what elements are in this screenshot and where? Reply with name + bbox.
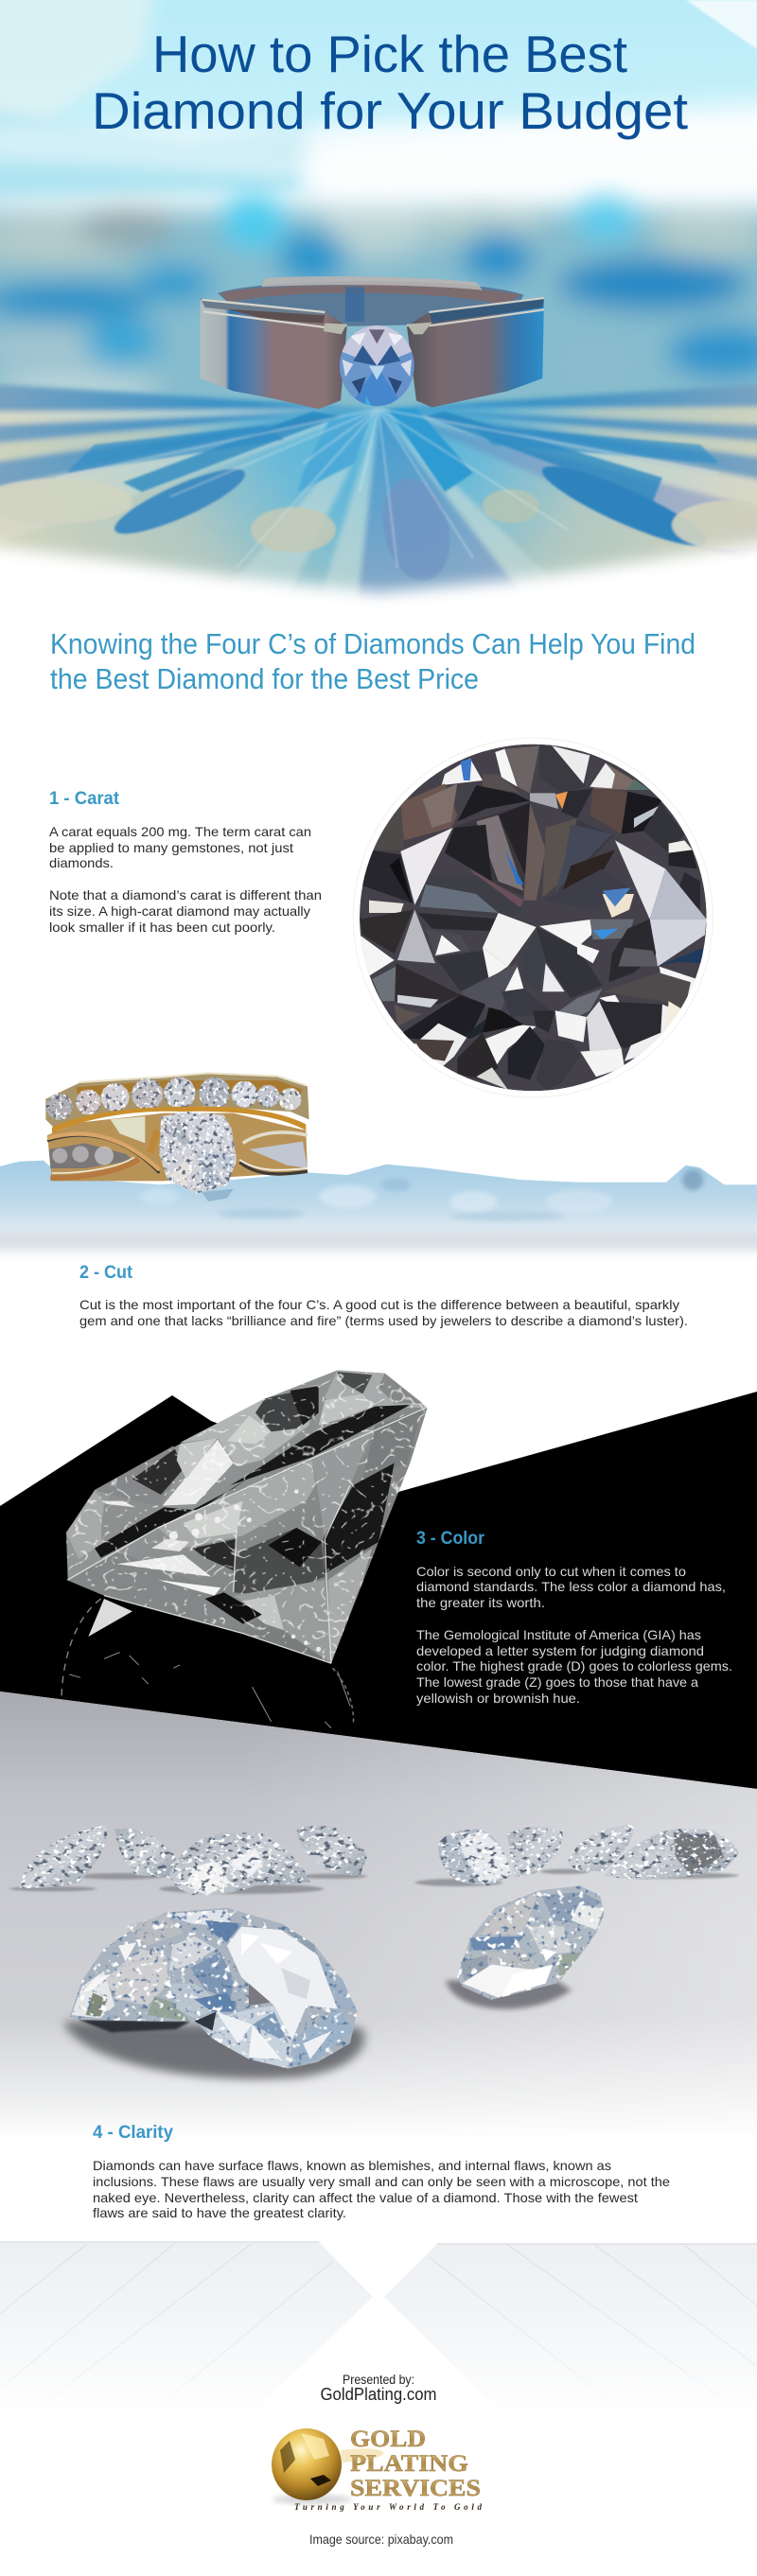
soft shadows (9, 1869, 739, 1894)
body (69, 1908, 358, 2069)
sparkle points (169, 1489, 321, 1652)
section 1: carat text: diamonds. (49, 855, 114, 870)
logo: Gold Plating Services: GOLD (350, 2427, 426, 2452)
section 3: color text: 3 - Color (416, 1529, 485, 1549)
small background diamonds (9, 1824, 739, 1896)
section 4: clarity text: Diamonds can have surface flaws, known as blemishes, and internal flaws, known as (93, 2158, 611, 2173)
ring gemstone (338, 324, 416, 410)
large right diamond (446, 1885, 605, 2009)
section 3: color text: developed a letter system for judging diamond (416, 1643, 704, 1658)
presented by credit: Presented by: (343, 2372, 414, 2387)
large left diamond (64, 1908, 364, 2079)
ring back band (218, 281, 523, 331)
grey studio backdrop (0, 1691, 757, 2176)
outer top facets (442, 759, 483, 785)
left side (360, 850, 414, 903)
section 1: carat text: Note that a diamond’s carat is different than (49, 887, 322, 902)
section 3: color text: diamond standards. The less color a diamond has, (416, 1579, 726, 1594)
section 4: clarity text (93, 2123, 670, 2220)
left band (201, 300, 347, 409)
section 1: carat text: its size. A high-carat diamond may actually (49, 903, 310, 919)
section 1: carat text: A carat equals 200 mg. The term carat can (49, 824, 311, 839)
hero ray details (0, 409, 757, 587)
section 3: color text: color. The highest grade (D) goes to colorless gems. (416, 1658, 732, 1674)
section 3: color text (416, 1529, 732, 1706)
right band (407, 298, 544, 408)
section 1: carat text: 1 - Carat (49, 789, 120, 809)
section 3: color text: yellowish or brownish hue. (416, 1691, 580, 1706)
lower stones right (249, 1142, 308, 1168)
bright crown table (227, 1927, 338, 2041)
channel stones (46, 1078, 302, 1120)
ice shelf (0, 1161, 757, 1262)
main kites (400, 828, 452, 905)
shadow (64, 2022, 364, 2079)
twist strands (47, 1135, 159, 1173)
pavilion facets (158, 1460, 315, 1549)
gold shank (52, 1107, 306, 1133)
hero photo: ring on blue glass (0, 0, 757, 662)
image source credit: Image source: pixabay.com (309, 2532, 453, 2547)
hero blurred blue band (0, 194, 757, 447)
hero white fades (0, 123, 757, 662)
section 1: carat text: look smaller if it has been cut poorly. (49, 920, 275, 935)
title: Diamond for Your Budget (92, 81, 688, 140)
top band (45, 1074, 309, 1130)
section 1: carat text: be applied to many gemstones, not just (49, 840, 293, 855)
round brilliant diamond (353, 738, 713, 1097)
ring on glass (201, 276, 544, 410)
girdle highlights (68, 1407, 428, 1663)
title (92, 25, 688, 140)
section 3: color text: the greater its worth. (416, 1595, 545, 1610)
section 4: clarity text: inclusions. These flaws are usually very small and can only be seen with a microscope, not the (93, 2174, 670, 2189)
presented by credit: GoldPlating.com (320, 2385, 437, 2404)
section 3: color text: The Gemological Institute of America (GIA) has (416, 1627, 701, 1642)
section 1: carat text (49, 789, 322, 935)
subtitle: Knowing the Four C’s of Diamonds Can Help You Find (50, 627, 695, 660)
crown facets (180, 1384, 319, 1466)
subtitle (50, 627, 695, 695)
section 4: clarity text: 4 - Clarity (93, 2123, 173, 2143)
logo: Gold Plating Services (272, 2427, 483, 2512)
ring backing (47, 1113, 308, 1181)
presented by credit (320, 2372, 437, 2404)
section 3: color text: The lowest grade (Z) goes to those that have a (416, 1674, 698, 1690)
section 2: cut text: Cut is the most important of the four C’s. A good cut is the difference between a beautiful, sparkly (79, 1297, 679, 1312)
section 2: cut text: gem and one that lacks “brilliance and fire” (terms used by jewelers to describe a diamond’s luster). (79, 1313, 688, 1328)
shadow (446, 1980, 571, 2009)
section 2: cut text (79, 1263, 688, 1328)
lower (435, 951, 508, 991)
section 3: color text: Color is second only to cut when it comes to (416, 1564, 686, 1579)
logo: Gold Plating Services: SERVICES (350, 2476, 481, 2501)
lower stones left (49, 1143, 132, 1168)
hero radiating glass rays (0, 383, 757, 624)
icon: gold globe (272, 2428, 383, 2504)
reflection (62, 1599, 354, 1728)
hero sky background (0, 0, 757, 218)
logo: Gold Plating Services: PLATING (350, 2451, 468, 2477)
two-tone engagement ring set (45, 1073, 309, 1201)
black angular panel (0, 1392, 757, 1789)
body (457, 1885, 605, 2000)
central upper star (454, 802, 530, 897)
title: How to Pick the Best (152, 25, 627, 83)
section 4: clarity text: naked eye. Nevertheless, clarity can affect the value of a diamond. Those with the fewest (93, 2190, 638, 2205)
section 4: clarity text: flaws are said to have the greatest clarity. (93, 2205, 346, 2220)
crack texture (66, 1370, 428, 1663)
footer chevron wood panel (0, 2242, 757, 2418)
subtitle: the Best Diamond for the Best Price (50, 662, 479, 695)
logo: Gold Plating Services: Turning Your World To Gold (294, 2502, 483, 2512)
section 3: reflected diamond (62, 1370, 428, 1728)
central bright (483, 913, 537, 967)
diamond body (66, 1370, 428, 1663)
gems group (19, 1824, 739, 1896)
section 2: cut text: 2 - Cut (79, 1263, 133, 1283)
solitaire stone (159, 1112, 237, 1194)
dark girdle band (230, 1405, 410, 1485)
